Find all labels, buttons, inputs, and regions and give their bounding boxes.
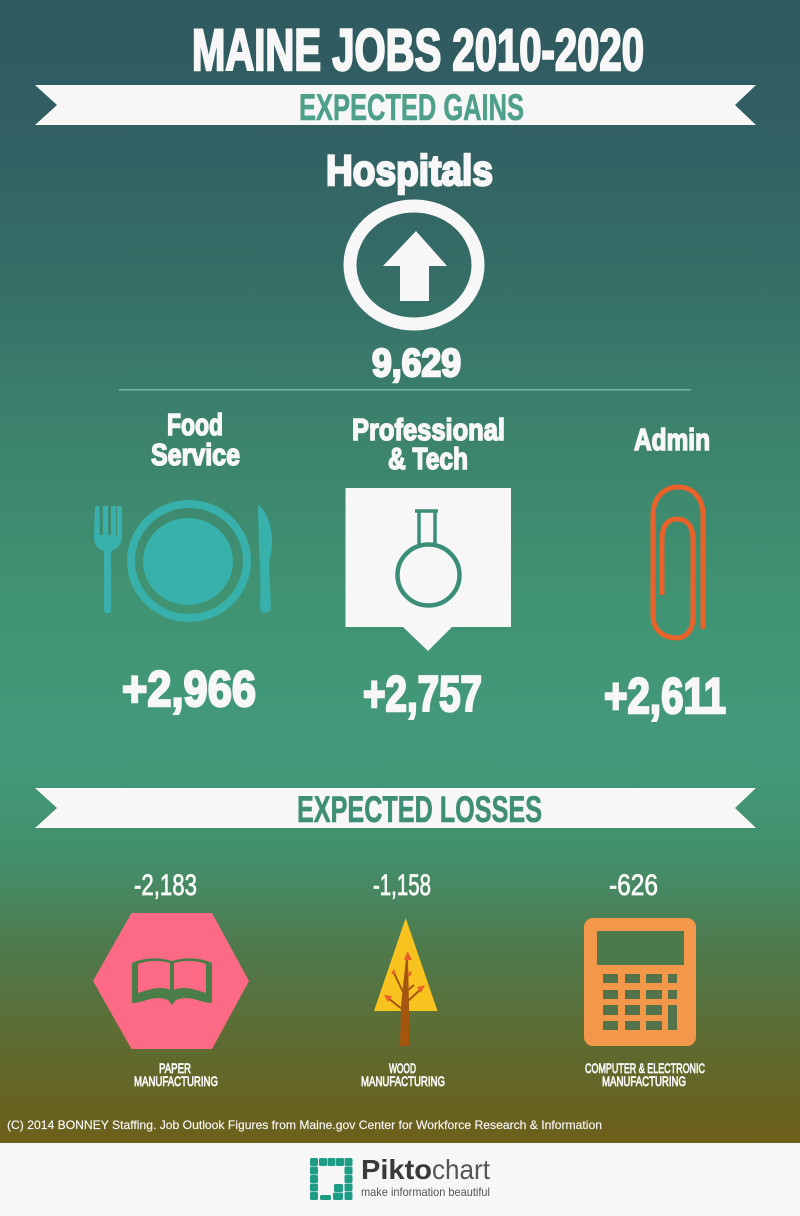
wordmark: Pikto	[361, 1154, 432, 1185]
column: computer and electronic manufacturing	[584, 869, 705, 1089]
icon: up arrow in circle	[350, 206, 478, 324]
ribbon: expected losses	[35, 788, 756, 830]
label: professional and tech: & Tech	[388, 441, 468, 476]
column: professional and tech	[346, 412, 511, 722]
icon: plate with fork and knife	[94, 504, 272, 618]
value: admin: +2,611	[604, 668, 726, 724]
label: computer and electronic manufacturing: COMPUTER & ELECTRONIC	[585, 1061, 705, 1076]
copyright note: (C) 2014 BONNEY Staffing. Job Outlook Figures from Maine.gov Center for Workforce Research & Information	[7, 1118, 602, 1132]
label: computer and electronic manufacturing: MANUFACTURING	[602, 1074, 686, 1089]
ribbon: expected gains	[35, 85, 756, 128]
label: admin: Admin	[634, 422, 710, 457]
label: professional and tech	[352, 412, 505, 476]
value: computer: -626	[609, 869, 658, 902]
value: wood: -1,158	[373, 869, 431, 902]
label: food service: Service	[151, 437, 240, 472]
column: paper manufacturing	[93, 869, 249, 1089]
icon: paper clip	[653, 487, 703, 638]
label: wood manufacturing: MANUFACTURING	[361, 1074, 445, 1089]
heading: hospitals: Hospitals	[326, 147, 493, 195]
heading: expected losses: EXPECTED LOSSES	[297, 789, 542, 830]
label: paper manufacturing: PAPER	[159, 1061, 191, 1076]
icon: piktochart logo	[310, 1158, 352, 1200]
tagline: make information beautiful	[361, 1185, 490, 1199]
label: professional and tech: Professional	[352, 412, 505, 447]
heading: expected gains: EXPECTED GAINS	[299, 87, 524, 128]
wordmark	[361, 1154, 490, 1185]
column: wood manufacturing	[361, 869, 445, 1089]
icon: book on hexagon	[93, 913, 249, 1049]
label: computer and electronic manufacturing	[585, 1061, 705, 1089]
icon: tree	[374, 918, 438, 1046]
label: paper manufacturing	[134, 1061, 218, 1089]
wordmark: chart	[432, 1154, 490, 1185]
column: food service	[94, 407, 272, 717]
label: paper manufacturing: MANUFACTURING	[134, 1074, 218, 1089]
label: food service	[151, 407, 240, 472]
label: food service: Food	[167, 407, 223, 442]
hospitals value: 9,629	[372, 342, 461, 385]
label: wood manufacturing	[361, 1061, 445, 1089]
value: professional and tech: +2,757	[363, 666, 482, 722]
value: food service: +2,966	[122, 661, 256, 717]
value: paper: -2,183	[134, 869, 197, 902]
icon: calculator	[584, 918, 696, 1046]
footer: piktochart branding	[0, 1143, 800, 1216]
icon: flask on callout	[346, 488, 511, 651]
column: admin	[604, 422, 726, 724]
label: wood manufacturing: WOOD	[389, 1061, 416, 1076]
